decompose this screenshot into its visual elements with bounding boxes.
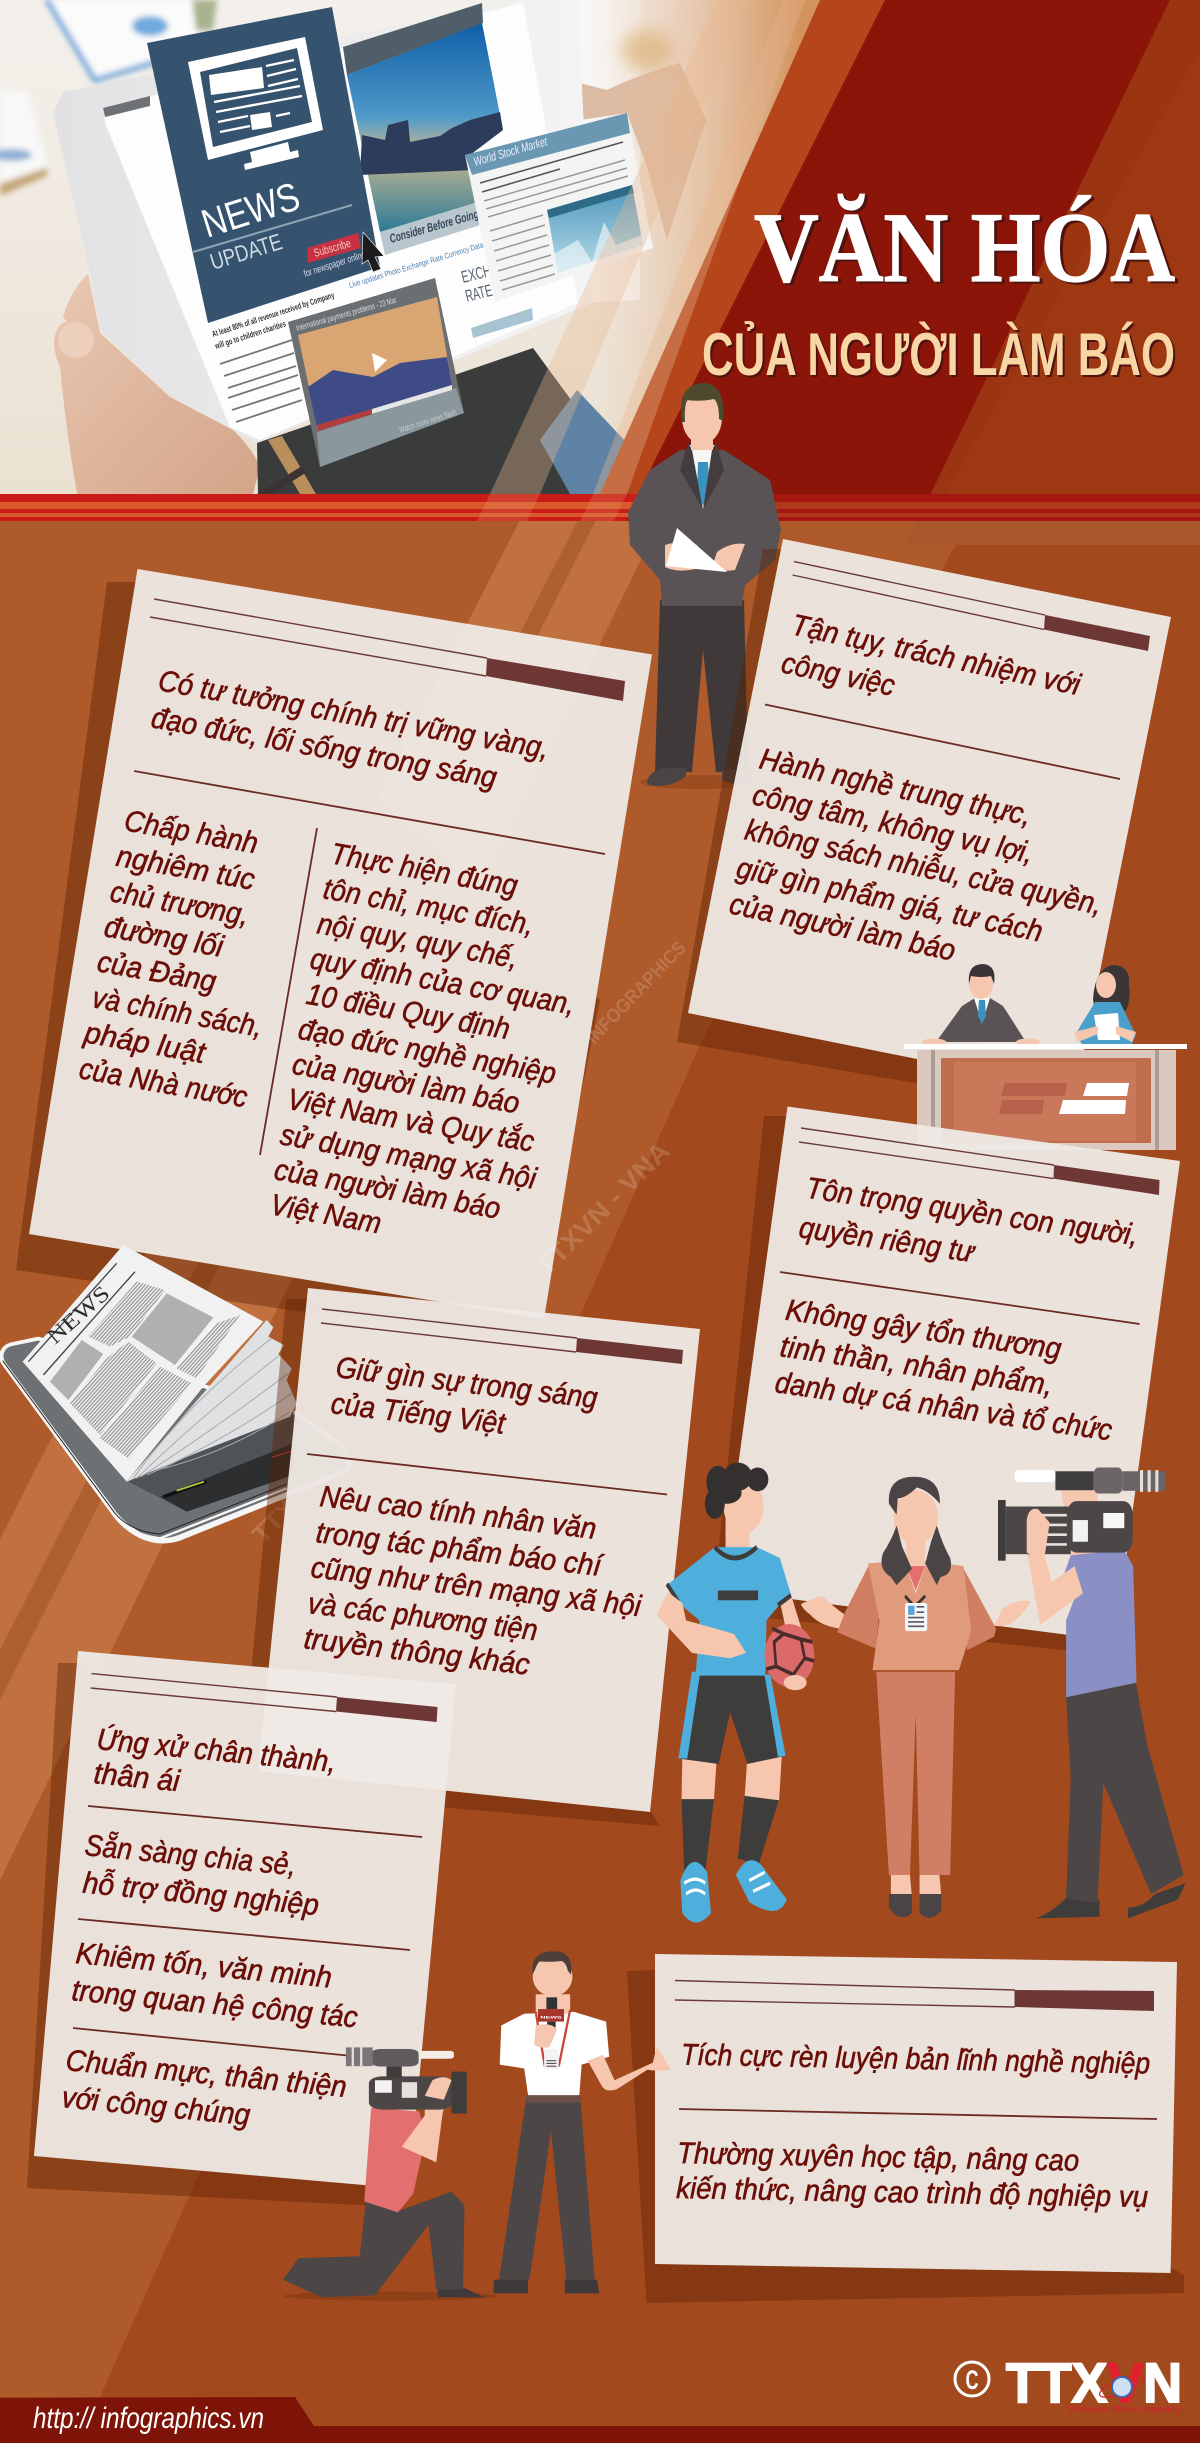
presenter: man [922,964,1040,1046]
right column text: của người làm báo [290,1048,522,1120]
left column text [77,804,265,1114]
icon: news desk with two presenters [904,964,1187,1150]
heading text: Giữ gìn sự trong sáng [334,1351,600,1415]
photo: top nav bar [343,3,483,75]
left column text: pháp luật [81,1016,209,1070]
photo: market article panel: World Stock Market [472,134,549,169]
photo: exchange rates heading: EXCH [459,261,493,287]
header photo: news on a tablet [0,0,834,494]
panel: colleagues and public conduct paper [27,1651,456,2207]
photo: article headline strip [380,202,490,255]
body text: giữ gìn phẩm giá, tư cách [734,852,1046,949]
item: sincere conduct: Ứng xử chân thành, [95,1723,337,1779]
body text [302,1480,644,1682]
item: friendly with the public: với công chúng [60,2081,252,2132]
masthead rules [28,1263,117,1362]
photo: exchange rates heading: RATE [463,281,494,306]
left column text: của Nhà nước [77,1052,250,1114]
body text: và các phương tiện [306,1587,539,1647]
photo: video link: Watch more news flash [398,407,458,435]
body text: Nêu cao tính nhân văn [318,1480,598,1546]
item: sharing with colleagues: hỗ trợ đồng nghiệp [81,1867,320,1922]
photo: blurred picture frame in background [0,0,217,196]
item: friendly with the public [60,2044,348,2132]
body text: Hành nghề trung thực, [757,743,1034,832]
photo: exchange rates heading [459,261,533,338]
photo: UPDATE label: UPDATE [207,228,285,275]
copyright mark [955,2362,989,2396]
photo: city picture [347,23,503,232]
photo: video title: International payments problems - 23 Mar [295,295,398,333]
newspaper columns [88,1282,165,1347]
globe [1097,2371,1147,2401]
body text: truyền thông khác [302,1622,531,1682]
body text: Không gây tổn thương [784,1294,1064,1366]
item: humility at work: Khiêm tốn, văn minh [74,1937,333,1995]
logo: TTXVN [955,2351,1183,2415]
red stripes under header [0,494,1200,521]
newspaper photos [132,1293,213,1365]
photo: wall behind right hand [523,0,640,303]
footer url: http:// infographics.vn [33,2402,264,2435]
body text: công tâm, không vụ lợi, [750,779,1036,870]
heading text: đạo đức, lối sống trong sáng [149,701,499,795]
heading text: quyền riêng tư [797,1211,978,1269]
item: sharing with colleagues: Sẵn sàng chia sẻ, [83,1829,298,1882]
left column text: nghiêm túc [114,840,257,897]
masthead NEWS: NEWS [42,1280,114,1349]
right column text: của người làm báo [272,1153,503,1226]
copyright mark: C [966,2365,978,2395]
left column text: chủ trương, [108,875,251,932]
body text [727,743,1105,968]
microphone flag label: NEWS [540,2016,562,2020]
photo: navy news panel [147,7,384,323]
watermark: TTX: TTX [246,1493,302,1549]
desk [904,1044,1187,1150]
photo: article body: At least 80% of all revenue received by Company [211,290,336,339]
body text: Thường xuyên học tập, nâng cao [677,2137,1079,2178]
watermark: TTXVN - VNA: TTXVN - VNA [530,1135,676,1281]
tablet screen [128,1410,293,1512]
heading text: Tận tụy, trách nhiệm với [789,609,1084,702]
right column text: tôn chỉ, mục đích, [321,872,536,942]
body text: tinh thần, nhân phẩm, [778,1330,1055,1402]
heading text: của Tiếng Việt [329,1387,508,1441]
photo: right hand [463,63,706,240]
item: sincere conduct: thân ái [92,1757,182,1798]
left column text: Chấp hành [122,804,260,860]
photo: monitor icon [188,37,323,170]
heading text: công việc [779,647,898,703]
right column text [268,837,577,1240]
presenter: woman [1074,965,1136,1048]
right column text: quy định của cơ quan, [308,942,577,1021]
panel: political ideology paper [16,569,652,1345]
header photo: news on a tablet: Consider Before Going [388,207,480,246]
icon: field reporter and kneeling cameraman [283,1951,670,2301]
right column text: Việt Nam và Quy tắc [285,1083,537,1159]
photo: article body: will go to children charities [213,318,287,351]
item: humility at work: trong quan hệ công tác [70,1974,359,2034]
item: humility at work [70,1937,359,2034]
reporter with microphone [494,1951,670,2293]
body text: danh dự cá nhân và tổ chức [773,1366,1114,1447]
kneeling cameraman [283,2047,484,2297]
photo: NEWS label: NEWS [196,175,305,247]
agency tagline: Vietnam News Agency [1067,2404,1183,2415]
body text [676,2137,1149,2214]
photo: panel caption: for newspaper online [303,250,367,280]
right column text: 10 điều Quy định [304,978,512,1046]
heading text: Tích cực rèn luyện bản lĩnh nghề nghiệp [681,2039,1150,2081]
body text: cũng như trên mạng xã hội [309,1551,644,1623]
right column text: nội quy, quy chế, [315,907,520,975]
body text [773,1294,1114,1447]
photo: market article panel [465,113,653,302]
body text: kiến thức, nâng cao trình độ nghiệp vụ [676,2172,1149,2214]
photo: left hand [54,274,260,494]
panel: dedication and honesty paper [677,539,1171,1100]
agency wordmark: TTXVN [1006,2351,1182,2414]
soccer player [657,1463,814,1922]
photo: tablet body [53,0,592,443]
heading text [329,1351,600,1441]
photo: navigation links: Live updates Photo Exchange Rate Currency Data [348,240,485,290]
photo: article body [211,290,336,422]
panel: Vietnamese language paper [240,1288,700,1826]
photo: cursor [362,232,384,272]
right column text: sử dụng mạng xã hội [278,1118,540,1196]
left column text: đường lối [102,910,227,964]
icon: newspaper on a tablet [0,1245,352,1544]
heading text: Tôn trọng quyền con người, [804,1172,1140,1252]
left column text: của Đảng [95,945,219,999]
top sheet [23,1245,263,1482]
watermark: INFOGRAPHICS: INFOGRAPHICS [582,937,691,1048]
header fade into the orange band [590,0,834,494]
body text: trong tác phẩm báo chí [314,1516,606,1583]
photo: video player panel [288,278,464,467]
right column text: Việt Nam [268,1188,384,1240]
photo: navy news panel: Subscribe [313,238,352,260]
right column text: Thực hiện đúng [328,837,520,903]
footer bar [0,2397,1200,2443]
item: friendly with the public: Chuẩn mực, thân thiện [64,2044,348,2104]
panel: professional mettle paper [627,1954,1184,2303]
item: sharing with colleagues [81,1829,320,1922]
tablet [0,1337,352,1544]
left column text: và chính sách, [90,981,265,1044]
page stack [127,1320,297,1482]
right column text: đạo đức nghề nghiệp [296,1013,559,1091]
icon: interview scene with player, reporter and cameraman [657,1463,1186,1922]
heading text: Có tư tưởng chính trị vững vàng, [156,664,551,766]
body text: của người làm báo [727,888,958,968]
photo: notebook, pencil and jeans [257,348,645,494]
cameraman [998,1467,1186,1918]
photo: subscribe button [307,233,361,263]
panel: human rights and privacy paper [712,1106,1180,1652]
icon: standing news anchor with paper [628,383,781,789]
female reporter [801,1477,1031,1918]
body text: không sách nhiễu, cửa quyền, [742,814,1105,922]
header colour bands [490,0,1200,545]
